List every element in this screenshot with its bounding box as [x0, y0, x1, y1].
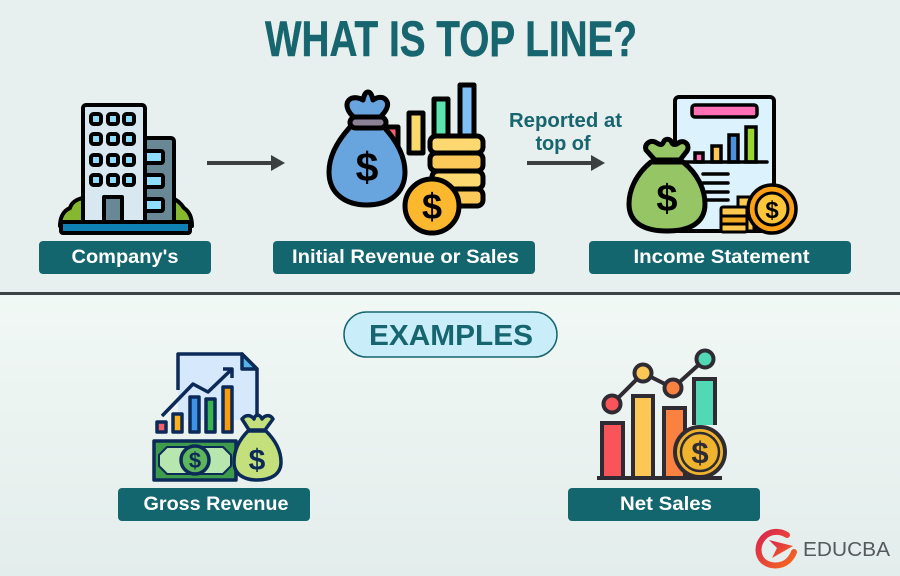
arrow: company to revenue [207, 155, 285, 171]
label: Net Sales: Net Sales [620, 494, 712, 515]
text: small coin dollar sign: $ [765, 197, 779, 224]
icon: money bag and coins [329, 85, 483, 233]
annotation: reported at top of: Reported at [509, 110, 622, 132]
label: Income Statement: Income Statement [634, 247, 810, 268]
label: Income Statement [589, 241, 851, 274]
logo: EDUCBA [758, 532, 891, 566]
annotation: reported at top of [509, 110, 622, 155]
arrow: revenue to income statement [527, 155, 605, 171]
label: Initial Revenue or Sales [273, 241, 535, 274]
icon: income statement document [629, 97, 796, 233]
label: Company's: Company's [72, 247, 178, 268]
label: Initial Revenue or Sales: Initial Revenue or Sales [292, 247, 519, 268]
logo: EDUCBA: EDUCBA [803, 539, 891, 561]
text: green bag dollar sign: $ [656, 178, 678, 220]
heading: examples [344, 312, 557, 357]
label: Gross Revenue [118, 488, 310, 521]
text: bag dollar sign: $ [356, 144, 379, 190]
annotation: reported at top of: top of [536, 133, 591, 155]
icon: office building [60, 105, 192, 233]
icon: gross revenue [154, 354, 281, 480]
label: Company's [39, 241, 211, 274]
text: bill dollar sign: $ [189, 448, 201, 473]
text: gross bag dollar sign: $ [249, 444, 266, 477]
label: Net Sales [568, 488, 760, 521]
icon: net sales chart [597, 350, 725, 478]
heading: examples: EXAMPLES [369, 320, 533, 352]
label: Gross Revenue: Gross Revenue [144, 494, 288, 515]
text: coin dollar sign: $ [422, 186, 442, 227]
text: net sales coin dollar sign: $ [691, 435, 709, 470]
title: WHAT IS TOP LINE? [265, 11, 637, 67]
